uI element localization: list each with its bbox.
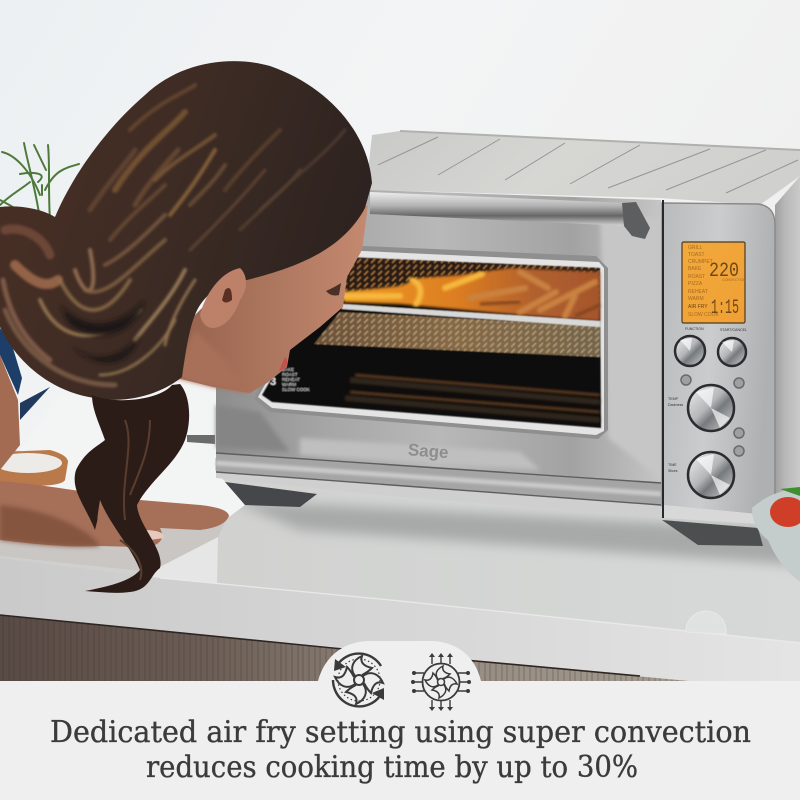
button labels: START/CANCEL <box>720 328 747 332</box>
counter front edge <box>0 558 800 682</box>
oven door <box>216 190 661 482</box>
oven right side <box>775 176 800 525</box>
LCD display: AIR FRY <box>688 304 708 310</box>
wood cabinet <box>0 615 700 682</box>
door print text: WARM <box>282 382 296 387</box>
air fry basket <box>340 257 600 310</box>
door brushed reflections <box>600 215 660 478</box>
interior reflections <box>345 380 600 420</box>
counter reflection of knob <box>686 611 726 634</box>
door print text: BAKE <box>282 367 294 372</box>
arm and top <box>0 328 50 470</box>
door print text: SLOW COOK <box>282 387 310 392</box>
countertop surface <box>0 450 800 645</box>
button labels: Darkness <box>668 403 683 407</box>
lower strip <box>216 453 661 518</box>
caption text <box>50 715 751 785</box>
knobs <box>675 336 746 498</box>
oven <box>216 131 800 546</box>
face and neck <box>173 205 368 393</box>
right foot <box>662 520 763 546</box>
small buttons <box>681 375 744 456</box>
oven top surface <box>366 131 800 205</box>
caption text: reduces cooking time by up to 30% <box>146 750 638 785</box>
basket lower mesh <box>314 312 600 357</box>
LCD display <box>682 242 746 323</box>
door print text: REHEAT <box>282 377 300 382</box>
hair: highlights <box>3 85 345 385</box>
hair: main <box>0 61 372 400</box>
door print text: ROAST <box>282 372 298 377</box>
counter reflection: white wall behind <box>0 380 245 520</box>
door print text <box>270 367 310 392</box>
ear <box>200 268 246 328</box>
button labels <box>668 327 747 473</box>
LCD display: 1:15 <box>711 297 739 320</box>
LCD display: CRUMPET <box>688 259 713 265</box>
LCD display: ROAST <box>688 274 705 280</box>
hair: dangling lock <box>75 384 189 593</box>
knob highlights <box>680 338 734 495</box>
bowl with tomato <box>752 487 800 582</box>
logo: Sage: Sage <box>407 440 449 462</box>
plant: rosemary <box>0 143 79 220</box>
LCD display: 220 <box>709 260 739 283</box>
LCD display: SLOW COOK <box>688 312 720 318</box>
control panel <box>662 200 775 524</box>
LCD display: PIZZA <box>688 281 703 287</box>
LCD display: CONVECTION <box>722 278 746 282</box>
window frame <box>254 245 608 439</box>
LCD display: BAKE <box>688 266 702 272</box>
oven interior <box>262 257 601 428</box>
oven shadow on counter <box>230 500 800 565</box>
woman <box>0 61 372 593</box>
button labels: TIME <box>668 463 677 467</box>
icon: fan with airflow arrows <box>411 653 471 711</box>
button labels: TEMP <box>668 397 679 401</box>
left foot <box>225 482 317 507</box>
caption panel <box>0 641 800 800</box>
background wall <box>0 0 800 500</box>
door print text: 3 <box>270 376 276 388</box>
hand on counter <box>0 481 229 547</box>
food: fries <box>342 268 600 321</box>
caption text: Dedicated air fry setting using super convection <box>50 715 751 750</box>
button labels: Slices <box>668 469 678 473</box>
icon: rotating fan <box>333 654 384 706</box>
LCD display: TOAST <box>688 252 705 258</box>
LCD display: REHEAT <box>688 289 708 295</box>
door handle <box>370 192 650 239</box>
rack rail <box>342 304 600 327</box>
LCD display: GRILL <box>688 245 703 251</box>
LCD display: WARM <box>688 296 704 302</box>
bowl with salt <box>0 450 68 486</box>
button labels: FUNCTION <box>685 327 704 331</box>
